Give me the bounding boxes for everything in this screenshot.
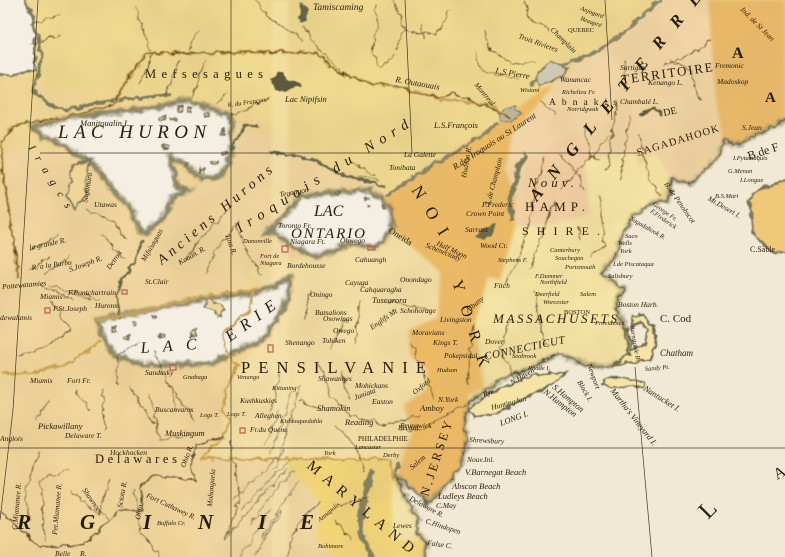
small place names: B.de F	[746, 140, 781, 163]
hamp: HAMP.	[525, 199, 585, 214]
small place names: Tegaagon	[279, 185, 309, 199]
Delaware river	[395, 462, 400, 478]
small place names: Fr.du Quene	[249, 425, 288, 434]
small place names: Tina R.	[223, 233, 239, 256]
small place names: Shawanoes	[318, 374, 352, 383]
Lake Huron	[33, 100, 231, 233]
Lake Tamiscaming	[300, 2, 308, 22]
small place names: Ind. de St Jean	[738, 4, 777, 43]
forts	[45, 246, 375, 433]
Superior lake corner	[0, 0, 35, 75]
Anciens Hurons: Anciens Hurons	[154, 163, 276, 269]
De Sagadahook	[636, 105, 721, 159]
small place names: C.Hindopen	[424, 516, 462, 536]
small place names: Hockhocken	[109, 448, 147, 457]
small place names: Kings T.	[432, 338, 458, 347]
small place names: Stephens F.	[498, 257, 528, 264]
small place names: Chambalé L.	[620, 97, 659, 106]
small place names: Newport	[585, 362, 603, 391]
small place names: Miamis	[39, 292, 63, 301]
small place names: Toronto Fr.	[278, 221, 312, 230]
small place names: False C.	[426, 538, 453, 551]
small place names: Champlain	[549, 25, 579, 55]
small place names: Mohickans	[354, 381, 388, 390]
small place names: Salem	[580, 291, 596, 298]
territory: New York	[385, 86, 553, 504]
small place names: Oxford	[411, 376, 433, 397]
Iroquois du Nord: Iroquois du Nord	[233, 116, 412, 237]
small place names: Miamis	[29, 376, 53, 385]
small place names: G.Menan	[728, 168, 752, 175]
Cape Cod: C. Cod	[660, 313, 692, 325]
territory: Acadie	[708, 0, 785, 146]
small place names: C.May	[436, 501, 457, 510]
fort markers	[45, 246, 375, 433]
Ontario shore shading	[267, 190, 393, 257]
small place names: Providence	[594, 320, 624, 327]
small place names: Lancaster	[354, 444, 381, 451]
small place names: Nouv.Inl.	[466, 455, 494, 464]
Lac Huron: LAC HURON	[57, 122, 207, 143]
small place names: L.S.François	[433, 120, 479, 130]
Ohio rivers	[20, 285, 195, 440]
small place names: Richelieu Fr.	[561, 89, 596, 96]
small place names: N.York	[437, 395, 459, 404]
New England rivers	[530, 40, 710, 270]
Ontario water	[267, 190, 393, 257]
Delawares: Delawares	[95, 452, 177, 466]
small place names: Cahuangh	[355, 255, 387, 264]
small place names: Boston Harb.	[618, 300, 659, 309]
small place names: Batsalions	[315, 308, 347, 317]
small place names: R.des Iroquois ou St Laurent	[450, 110, 538, 172]
Atlantic ocean	[397, 113, 785, 557]
territory: upper Iroquois country	[200, 225, 440, 459]
small place names: Mohongaela	[205, 468, 217, 508]
Lake Erie	[97, 277, 290, 365]
small place names: Wistani	[520, 87, 540, 94]
small place names: Deerfield	[534, 291, 560, 298]
small place names: Logs T.	[226, 411, 246, 418]
small place names: Fort Fr.	[66, 376, 91, 385]
Acadie letters: A	[732, 45, 744, 62]
small place names: Buffalo Cr.	[157, 520, 186, 527]
Nova Scotia	[748, 175, 785, 253]
small place names: Kouan. R.	[176, 244, 207, 267]
small place names: Sciota R.	[115, 480, 129, 508]
small place names: Salisbury	[608, 273, 633, 280]
small place names: Barnstable B.	[628, 325, 641, 362]
small place names: Onondago	[400, 275, 432, 284]
small place names: F.St.Joseph	[52, 304, 87, 313]
small place names: Northfield	[539, 279, 567, 286]
small place names: Reading	[344, 417, 373, 427]
small place names: Hurons	[94, 301, 117, 310]
Ottawa river line	[2, 52, 510, 277]
small place names: S.Jean	[742, 123, 762, 132]
western boundary band	[2, 52, 510, 277]
small place names: dewalamis	[0, 313, 32, 322]
islands in lakes	[112, 106, 385, 339]
northern rivers	[30, 0, 550, 115]
small place names: Worcester	[543, 299, 569, 306]
lake and north names: Tamiscaming	[313, 3, 364, 13]
small place names: Martha's Vineyard I.	[608, 385, 659, 447]
small place names: Wells	[618, 240, 632, 247]
small place names: Kushkuskies	[239, 396, 277, 405]
small place names: Ohwego	[340, 236, 365, 245]
small place names: Trois Rivieres	[517, 31, 559, 54]
territory: Massachusetts and Connecticut	[475, 153, 672, 385]
small place names: Anglois	[0, 434, 23, 443]
small place names: Pottewatamies	[1, 278, 47, 291]
territory: north New England	[505, 0, 722, 228]
Ontario islands	[335, 192, 385, 208]
Montreal lake	[500, 106, 522, 122]
small place names: Logs T.	[199, 412, 219, 419]
upper connecting rivers	[33, 35, 170, 110]
small place names: Sarrant	[465, 225, 489, 234]
Territoire: TERRITOIRE	[620, 59, 714, 87]
Erie islands	[112, 316, 195, 339]
Connecticut: CONNECTICUT	[483, 334, 567, 363]
Huron islands	[160, 106, 227, 173]
Iragcs tribal label: Iragcs	[25, 142, 74, 211]
Huron water	[33, 100, 231, 233]
small place names: Schohorage	[400, 306, 436, 315]
Connecticut river	[500, 155, 547, 380]
small place names: Fort de	[259, 253, 279, 260]
small place names: I.Longue	[739, 177, 763, 184]
small place names: Ohio R.	[178, 444, 195, 469]
small place names: Detroit	[104, 248, 124, 272]
nouv: Nouv.	[527, 175, 574, 190]
small place names: Bohimore	[318, 543, 344, 550]
Lake Nipissing	[272, 72, 302, 93]
small place names: QUEBEC	[568, 27, 594, 34]
small place names: Bordehousse	[287, 261, 326, 270]
Iroquois rivers	[185, 160, 380, 275]
small place names: B. de Penobscot	[662, 180, 698, 226]
Cape Cod	[612, 315, 656, 365]
small place names: Tonibata	[389, 163, 416, 172]
Oneida lake	[475, 222, 497, 240]
Pensilvanie: PENSILVANIE	[241, 358, 426, 377]
Massachusets: MASSACHUSETS	[492, 311, 618, 326]
small place names: York	[324, 450, 336, 457]
territory: Anciens Hurons lands	[0, 120, 385, 370]
small place names: Muskingum	[164, 428, 205, 438]
small place names: Hudson R.	[459, 145, 473, 179]
small place names: Crown Point	[466, 209, 505, 218]
territory: Delaware shore	[392, 480, 420, 540]
small place names: Ludleys Beach	[437, 491, 488, 501]
small place names: Norridgwak	[566, 106, 599, 113]
Lac Erie	[139, 297, 279, 357]
small place names: Englifs Mt	[367, 306, 400, 332]
Lake Ontario	[267, 190, 393, 257]
Jersey: N.JERSEY	[418, 419, 455, 498]
small place names: I.de Piscataqua	[612, 261, 654, 268]
small place names: La Galette	[403, 150, 437, 159]
Chesapeake bay	[360, 470, 372, 557]
small place names: Sagadahook R.	[629, 216, 667, 242]
ocean L: L	[694, 495, 723, 524]
small place names: Anjogard	[578, 5, 605, 20]
small place names: G.Miamanee R.	[10, 482, 23, 530]
small place names: Annapolis	[316, 501, 342, 524]
Erie bay land	[205, 298, 225, 317]
Lac St Pierre	[535, 62, 568, 85]
small place names: Hudson	[436, 367, 457, 374]
small place names: Tohiken	[322, 336, 346, 345]
small place names: Owego	[333, 326, 354, 335]
St Lawrence river	[385, 0, 665, 196]
small place names: Livingston	[439, 315, 472, 324]
Chatham: Chatham	[660, 348, 694, 358]
small place names: BOSTON	[564, 309, 590, 316]
ridge strokes	[225, 385, 300, 557]
small place names: Sandusky	[145, 368, 174, 377]
Ohio river	[0, 437, 223, 547]
territory: New Hampshire tint	[518, 130, 590, 225]
small place names: Wood Cr.	[480, 241, 508, 250]
small place names: F.Frederick	[648, 207, 678, 231]
Detroit river	[118, 240, 143, 320]
ocean coast shading	[397, 113, 785, 557]
small place names: B.S.Mari	[715, 193, 739, 200]
small place names: Oneida	[387, 225, 414, 247]
small place names: York	[620, 248, 632, 255]
small place names: Sartigan	[620, 63, 646, 72]
lac erie first word: LAC	[139, 336, 197, 357]
fold crease	[272, 0, 288, 557]
small place names: Abscon Beach	[451, 481, 500, 491]
small place names: F.Dummer	[534, 273, 563, 280]
ontario word: ONTARIO	[291, 226, 365, 242]
small place names: Oningo	[310, 290, 333, 299]
small place names: S.Joseph R.	[68, 253, 103, 274]
small place names: Delaware R.	[407, 493, 446, 519]
Nouv Hampshire	[522, 175, 600, 238]
ocean coast line	[397, 113, 785, 557]
small place names: Brunswick	[400, 421, 432, 430]
small place names: Osowings	[323, 314, 353, 323]
small place names: Sandy Pt.	[645, 364, 670, 373]
small place names: P.Frederic	[481, 200, 514, 209]
small place names: Madoskop	[716, 77, 748, 86]
small place names: Lac Nipifsin	[284, 94, 327, 104]
Virginia rivers	[25, 440, 370, 557]
small place names: Amboy	[419, 403, 444, 413]
small place names: R. du François	[226, 97, 267, 109]
small place names: Gnabaga	[183, 374, 207, 381]
small place names: Danonville	[242, 238, 272, 245]
small place names: Fremonic	[714, 61, 745, 70]
small place names: Dover	[484, 337, 504, 346]
territory: northern Canada	[0, 0, 708, 197]
small place names: Pickawillany	[37, 421, 83, 431]
small place names: Wanancac	[560, 75, 592, 84]
small place names: N.Haven	[508, 366, 536, 387]
small place names: Shrewsbury	[469, 435, 505, 446]
small place names: V.Barnegat Beach	[465, 467, 526, 477]
small place names: R. Outaouais	[394, 74, 441, 92]
small place names: F.Pontchartrain	[67, 288, 116, 297]
Lake Champlain	[510, 155, 527, 222]
small place names: Fort Cuthawey R.	[144, 490, 197, 522]
Saginaw bay land	[68, 160, 90, 208]
small place names: Kittaning	[271, 385, 297, 392]
small place names: Mifsisaguas	[138, 227, 165, 264]
small place names: PHILADELPHIE	[358, 435, 408, 443]
small place names: Kishkoquedahla	[279, 418, 322, 425]
small place names: C.Sable	[750, 245, 776, 254]
small place names: Shenango	[285, 338, 315, 347]
small place names: George Fr.	[651, 201, 678, 223]
Acadie second letter: A	[765, 90, 776, 106]
small place names: Niagara Ft.	[289, 237, 326, 246]
small place names: L.S.Pierre	[494, 65, 531, 81]
Mefsesagues: Mefsesagues	[145, 67, 263, 81]
small place names: Tuscarora	[372, 295, 407, 305]
small place names: LONG I.	[497, 408, 530, 428]
small place names: Pet.Miamanee R.	[50, 483, 64, 536]
small place names: Easton	[371, 397, 393, 406]
small place names: Manitoualin I.	[79, 118, 129, 128]
small place names: Moravians	[411, 328, 445, 337]
small place names: Sagamaro	[80, 171, 94, 203]
small place names: R. a la Barbu	[30, 257, 73, 272]
Lac Ontario	[291, 203, 365, 242]
small place names: I.Pytamaquis	[732, 155, 768, 162]
Georgian bay river chain	[231, 125, 385, 187]
sagadahook: SAGADAHOOK	[636, 123, 721, 159]
small place names: Schenectady	[424, 241, 463, 263]
small place names: Utawas	[94, 200, 117, 209]
small place names: Bristol	[398, 423, 418, 432]
territory: Maryland	[287, 459, 430, 557]
small place names: Nantucket I.	[641, 383, 682, 414]
small place names: L.de Champlain	[483, 156, 505, 206]
Abnakis: Abnakis	[549, 98, 617, 108]
small place names: Souchegan	[555, 255, 584, 262]
small place names: Saco	[625, 233, 638, 240]
small place names: Shamokin	[317, 403, 351, 413]
Hudson river	[400, 324, 475, 430]
small place names: N.Hampton	[541, 386, 579, 419]
Martha's Vineyard and Nantucket	[602, 377, 645, 387]
small place names: Canterbury	[550, 247, 580, 254]
small place names: Huntingdon	[489, 394, 527, 412]
small place names: Alleghen	[254, 411, 282, 420]
lac erie second word: ERIE	[222, 297, 279, 346]
small place names: Buscanvaros	[155, 405, 194, 414]
small place names: Beaupré	[579, 15, 603, 30]
Moosehead lake	[640, 108, 662, 115]
small place names: Block I.	[575, 378, 595, 403]
small place names: Albany	[463, 294, 486, 315]
de: DE	[662, 105, 678, 119]
boundary band south	[0, 290, 393, 480]
small place names: la grande R.	[29, 235, 67, 252]
Michigan rivers	[30, 210, 125, 275]
small place names: Lewes	[392, 521, 412, 530]
small place names: Shawnoes	[80, 486, 105, 516]
Pennsylvania rivers	[270, 290, 430, 470]
Virginie: RGINIE	[16, 510, 314, 534]
small place names: Kenango L.	[647, 78, 683, 87]
small place names: Venango	[237, 374, 260, 381]
small place names: Niagara	[259, 260, 282, 267]
Maryland: MARYLAND	[303, 458, 417, 557]
Erie water	[97, 277, 290, 365]
small place names: Rye	[481, 386, 496, 399]
small place names: Pokepsidal	[443, 351, 477, 360]
small place names: Portsmouth	[564, 264, 595, 271]
small place names: Delaware T.	[64, 431, 102, 440]
small place names: St.Clair	[145, 277, 169, 286]
small place names: Ohio	[133, 504, 145, 520]
small place names: Half Moon	[434, 238, 469, 261]
Huron shore shading	[33, 100, 231, 233]
mountain ridges	[225, 385, 300, 557]
Nouvelle York: NOI	[408, 182, 453, 239]
territory: lower Virginia	[200, 459, 333, 557]
small place names: Rhode I.	[527, 365, 550, 372]
small place names: Cayuga	[345, 278, 369, 287]
Long Island	[468, 372, 568, 417]
small place names: Mt.Desert I.	[705, 193, 742, 220]
lac word: LAC	[313, 203, 344, 220]
territory: Ohio country	[0, 342, 240, 557]
small place names: Montreal	[472, 80, 497, 107]
York letters: YORK	[448, 278, 492, 369]
small place names: Salem	[408, 452, 428, 472]
small place names: S.Hampton	[551, 382, 586, 414]
shire: SHIRE.	[522, 224, 600, 238]
small place names: Seabrook	[512, 353, 536, 360]
small place names: Derby	[382, 452, 399, 459]
small place names: Fitch	[493, 281, 510, 290]
small place names: Cahquaragha	[360, 285, 402, 294]
small place names: Juniata	[353, 386, 377, 402]
Erie shore shading	[97, 277, 290, 365]
